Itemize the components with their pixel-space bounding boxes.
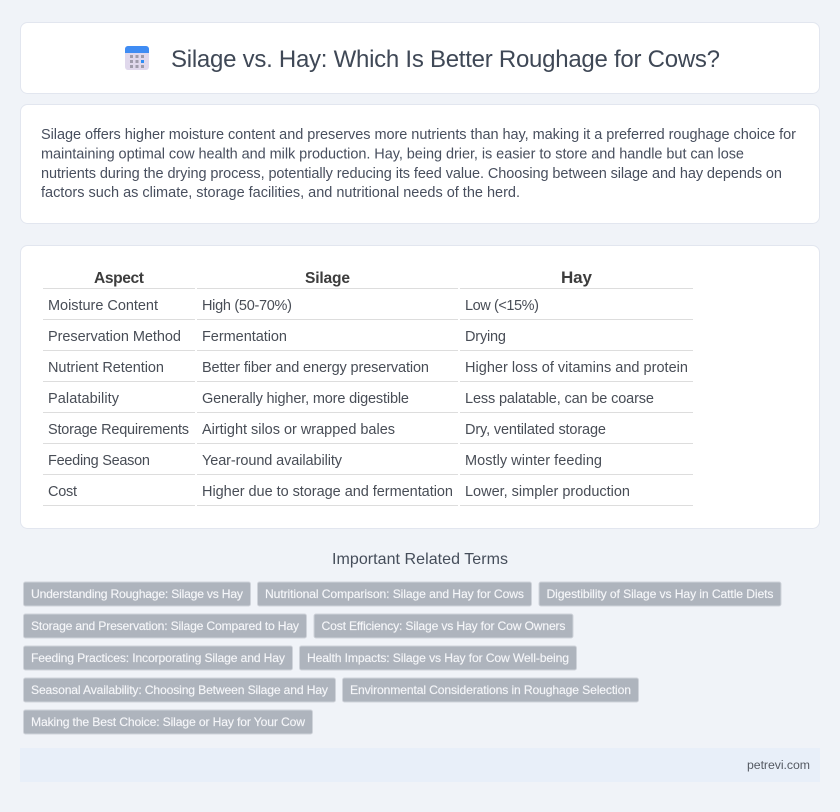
panel: introduction (20, 104, 820, 224)
row: palatability: Palatability (48, 391, 120, 407)
table header (94, 268, 593, 287)
panel: related term chips: Understanding Roughage: Silage vs Hay (31, 587, 244, 601)
panel: comparison table (20, 246, 820, 528)
panel: related term chips: Seasonal Availability: Choosing Between Silage and Hay (31, 683, 329, 697)
row: nutrient retention: Higher loss of vitamins and protein (465, 360, 688, 376)
title: Silage vs. Hay: Which Is Better Roughage for Cows? (171, 46, 720, 73)
row: storage requirements: Storage Requirements (48, 422, 189, 438)
panel: related term chips: Digestibility of Silage vs Hay in Cattle Diets (546, 587, 774, 601)
panel: footer (20, 748, 820, 782)
row: cost: Cost (48, 484, 77, 500)
text block: introduction: nutrients during the drying process, potentially reducing its feed value. Choosing between silage and hay depends on (41, 166, 782, 182)
panel: related term chips: Environmental Considerations in Roughage Selection (350, 683, 631, 697)
row: preservation method: Drying (465, 329, 506, 345)
table rules (43, 288, 693, 506)
panel: related term chips: Cost Efficiency: Silage vs Hay for Cow Owners (322, 619, 566, 633)
table header: Aspect (94, 270, 144, 287)
heading: important related terms: Important Related Terms (332, 551, 508, 568)
footer source: petrevi.com (747, 758, 810, 772)
row: storage requirements (48, 422, 606, 438)
panel: related term chips (24, 582, 781, 734)
row: palatability: Generally higher, more digestible (202, 391, 409, 407)
table header: Silage (305, 270, 350, 287)
table header: Hay (561, 268, 593, 287)
panel: related term chips: Making the Best Choice: Silage or Hay for Your Cow (31, 715, 305, 729)
row: storage requirements: Airtight silos or wrapped bales (202, 422, 395, 438)
row: feeding season: Mostly winter feeding (465, 453, 602, 469)
row: cost: Higher due to storage and fermentation (202, 484, 453, 500)
row: palatability (48, 391, 654, 407)
row: preservation method (48, 329, 506, 345)
row: preservation method: Fermentation (202, 329, 287, 345)
panel: header (20, 22, 820, 94)
row: cost (48, 484, 630, 500)
row: feeding season: Feeding Season (48, 453, 150, 469)
panel: related term chips: Storage and Preservation: Silage Compared to Hay (31, 619, 300, 633)
row: nutrient retention: Better fiber and energy preservation (202, 360, 429, 376)
icon: calendar (125, 46, 149, 70)
row: moisture content: High (50-70%) (202, 298, 292, 314)
row: feeding season: Year-round availability (202, 453, 343, 469)
row: nutrient retention: Nutrient Retention (48, 360, 164, 376)
text block: introduction (41, 127, 796, 201)
row: cost: Lower, simpler production (465, 484, 630, 500)
panel: related term chips: Health Impacts: Silage vs Hay for Cow Well-being (307, 651, 569, 665)
row: preservation method: Preservation Method (48, 329, 181, 345)
text block: introduction: Silage offers higher moisture content and preserves more nutrients than hay, making it a preferred roughage choice for (41, 127, 796, 143)
text block: introduction: maintaining optimal cow health and milk production. Hay, being drier, is easier to store and handle but can lose (41, 146, 744, 162)
row: storage requirements: Dry, ventilated storage (465, 422, 606, 438)
row: moisture content: Moisture Content (48, 298, 158, 314)
row: moisture content (48, 298, 539, 314)
row: palatability: Less palatable, can be coarse (465, 391, 654, 407)
text block: introduction: factors such as climate, storage facilities, and nutritional needs of the herd. (41, 185, 520, 201)
panel: related term chips: Feeding Practices: Incorporating Silage and Hay (31, 651, 286, 665)
row: moisture content: Low (<15%) (465, 298, 539, 314)
panel: related term chips: Nutritional Comparison: Silage and Hay for Cows (265, 587, 524, 601)
row: nutrient retention (48, 360, 688, 376)
row: feeding season (48, 453, 602, 469)
